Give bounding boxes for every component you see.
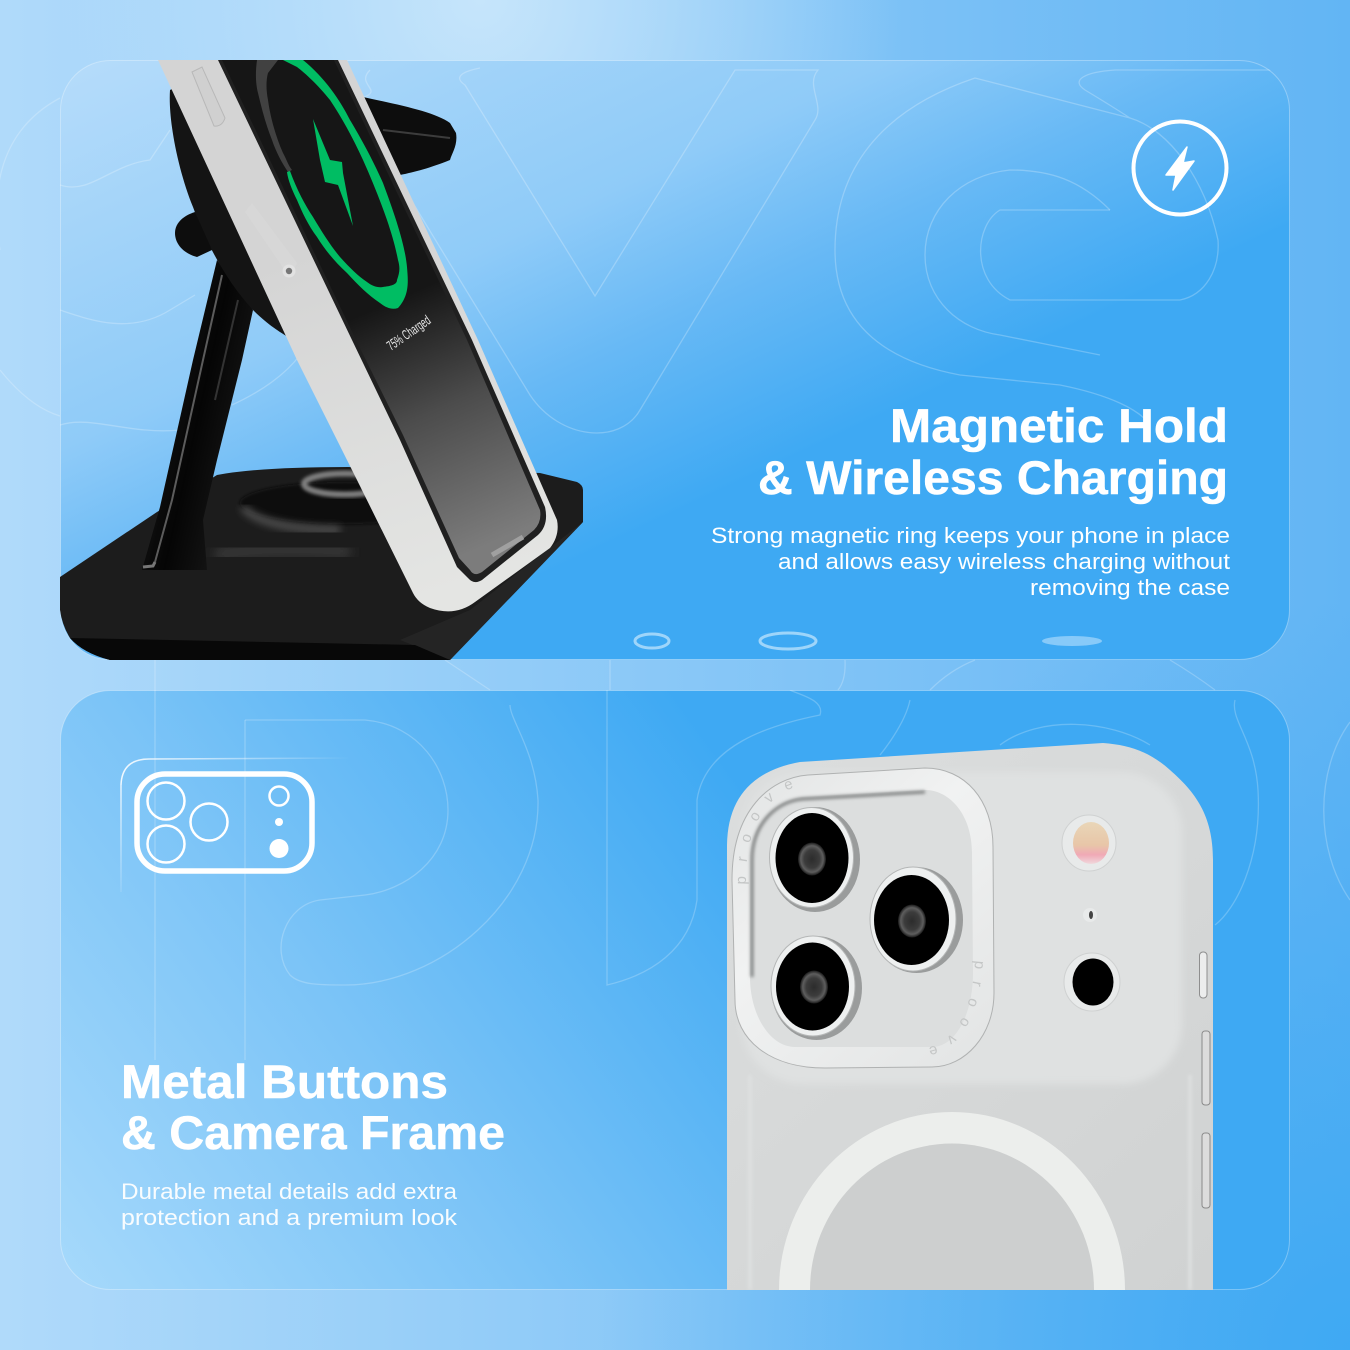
icon: camera module <box>121 758 350 892</box>
camera lens 3 <box>771 936 862 1040</box>
heading: magnetic hold: Magnetic Hold <box>890 399 1228 452</box>
stand rear disc and arm <box>170 89 456 336</box>
lidar sensor <box>1064 953 1120 1011</box>
stand base <box>60 467 583 660</box>
microphone <box>1083 908 1097 922</box>
charge label: 75% Charged <box>385 314 434 354</box>
flash <box>1062 815 1116 871</box>
panel: metal buttons <box>60 660 1290 1290</box>
heading: magnetic hold <box>758 399 1228 504</box>
camera lens 1 <box>770 807 860 912</box>
icon: lightning bolt <box>1134 122 1226 214</box>
text: magnetic hold description: removing the case <box>1030 575 1230 600</box>
text: magnetic hold description <box>711 523 1231 600</box>
brand engraving: proove <box>738 781 792 884</box>
text: metal buttons description: Durable metal details add extra <box>121 1179 458 1204</box>
side buttons <box>1200 952 1210 1208</box>
camera lens 2 <box>870 867 963 973</box>
photo: phone on wireless charging stand <box>60 60 583 660</box>
text: metal buttons description: protection and a premium look <box>121 1205 458 1230</box>
background outline lettering behind panels <box>0 98 1350 1060</box>
heading: metal buttons: & Camera Frame <box>121 1106 505 1159</box>
lightning bolt <box>313 119 353 226</box>
stand leg <box>142 260 253 570</box>
text: magnetic hold description: and allows easy wireless charging without <box>778 549 1231 574</box>
brand engraving lower: proove <box>930 961 983 1054</box>
heading: metal buttons: Metal Buttons <box>121 1055 448 1108</box>
metal camera frame <box>732 768 994 1068</box>
heading: magnetic hold: & Wireless Charging <box>758 451 1228 504</box>
magnetic ring <box>779 1112 1125 1290</box>
text: magnetic hold description: Strong magnetic ring keeps your phone in place <box>711 523 1230 548</box>
phone bezel <box>218 60 546 582</box>
heading: metal buttons <box>121 1055 505 1159</box>
phone screen <box>222 60 540 574</box>
watermark lettering bottom panel <box>155 660 1258 1060</box>
case body <box>727 743 1213 1290</box>
phone case <box>158 60 558 611</box>
raised camera plateau <box>814 784 1191 1288</box>
photo: phone case back <box>727 743 1213 1290</box>
watermark lettering top panel <box>40 68 1290 649</box>
text: metal buttons description <box>121 1179 458 1230</box>
green charging ring <box>283 60 408 309</box>
panel: magnetic hold <box>40 60 1290 660</box>
magnetic ring on screen <box>256 60 292 172</box>
phone details <box>192 67 523 555</box>
